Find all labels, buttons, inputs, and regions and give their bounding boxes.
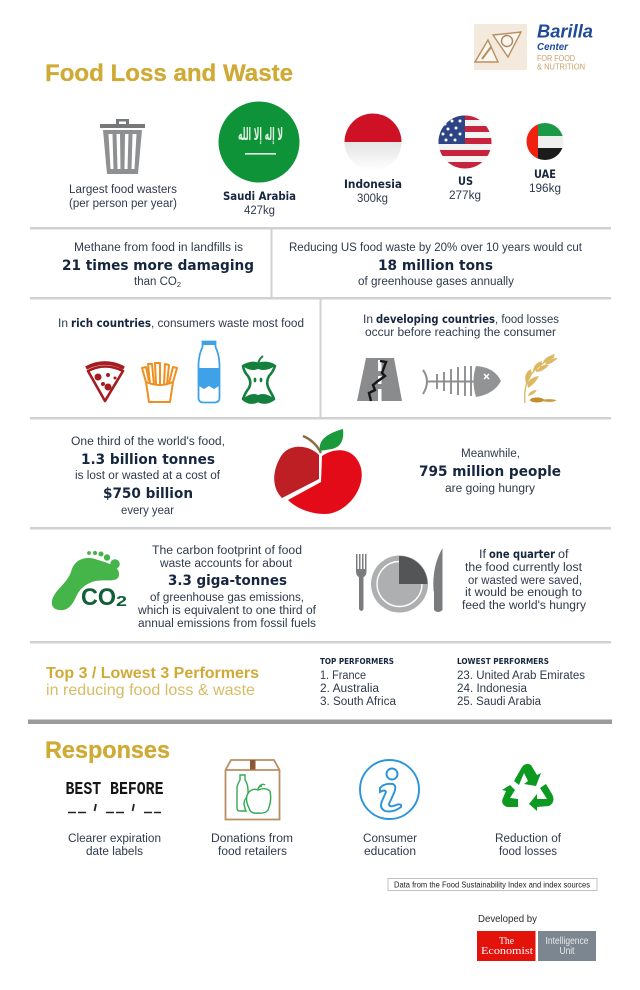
logo: The Economist: The [499,936,515,947]
logo: Barilla Center: & NUTRITION [537,62,585,72]
icon: pizza [86,363,124,401]
icon: apple pie chart [274,429,362,514]
response label: reduction of food losses [495,833,562,858]
response label: consumer education [363,833,417,858]
text block: reducing US food waste: Reducing US food waste by 20% over 10 years would cut [289,242,583,254]
text: rich countries: , consumers waste most food [151,318,304,330]
text block: methane: 2 [177,280,181,289]
text block: one quarter: it would be enough to [465,587,582,599]
icon: fish skeleton [423,366,501,397]
list: lowest performers: 24. Indonesia [457,683,528,695]
text block: hungry: are going hungry [445,483,535,495]
icon: information [360,760,419,819]
icon: best before label: BEST BEFORE [66,780,164,800]
logo: Intelligence Unit: Intelligence [546,936,589,947]
text: developing countries [363,312,559,339]
text block: methane: than CO [134,276,177,288]
text block: carbon footprint [137,545,317,630]
list: top performers: 3. South Africa [320,696,397,708]
icon: plate with fork and knife [356,548,442,612]
text block: one third: One third of the world's food, [71,436,225,448]
list: top performers [320,657,397,708]
text block: one quarter: feed the world's hungry [462,600,586,612]
text: developing countries: occur before reaching the consumer [365,327,556,339]
logo: Barilla Center: Barilla [537,22,593,42]
response label: expiration [68,833,161,858]
response label: consumer education: Consumer [363,833,417,845]
text block: methane [62,242,254,289]
icon: bottle [198,341,220,402]
text block: one quarter: If [479,549,487,561]
logo: Barilla Center: Center [537,42,569,53]
label: Saudi Arabia 427kg: 427kg [244,205,275,217]
text block: one third [71,436,225,517]
text block: one quarter: or wasted were saved, [468,575,582,587]
label: Saudi Arabia 427kg: Saudi Arabia [223,189,296,203]
response label: consumer education: education [364,846,416,858]
text: rich countries [58,316,304,330]
label: largest food wasters: (per person per year) [69,198,177,210]
response label: reduction of food losses: food losses [499,846,557,858]
icon: fries [142,363,177,402]
label: Indonesia 300kg: 300kg [357,193,388,205]
flag: US [438,115,492,169]
label: Indonesia 300kg [344,177,402,205]
flag: UAE [526,123,564,160]
logo: Intelligence Unit: Unit [560,946,575,957]
heading: top 3 lowest 3 performers [46,665,259,699]
icon: best before label [66,780,164,812]
list: lowest performers: 25. Saudi Arabia [457,696,542,708]
label: UAE 196kg: 196kg [529,183,561,195]
icon: wheat [525,354,558,403]
icon: cracked road [357,358,402,401]
response label: expiration: date labels [86,846,143,858]
heading: top 3 lowest 3 performers: Top 3 / Lowest 3 Performers [46,665,259,682]
text block: one third: $750 billion [103,486,193,502]
label: US 277kg: US [458,174,473,188]
text block: one quarter: one quarter [489,547,555,561]
label: US 277kg [449,174,481,202]
text block: methane: 21 times more damaging [62,258,254,274]
text block: hungry [419,448,561,495]
list: lowest performers [457,657,585,708]
developed by: Developed by [478,914,537,925]
icon: CO2 footprint: 2 [116,593,127,610]
icon: trash can [100,119,145,174]
list: top performers: 1. France [320,670,366,682]
icon: apple core [243,356,275,403]
icon: CO2 footprint: CO [81,584,116,611]
text: rich countries: rich countries [71,316,151,330]
text block: carbon footprint: which is equivalent to one third of [137,605,317,617]
title: Food Loss and Waste [45,60,293,87]
list: top performers: 2. Australia [320,683,380,695]
text block: carbon footprint: annual emissions from fossil fuels [138,618,316,630]
label: Saudi Arabia 427kg [223,189,296,217]
text block: one quarter [462,547,586,612]
source note: Data from the Food Sustainability Index and index sources [394,880,590,890]
response label: expiration: Clearer expiration [68,833,161,845]
text block: hungry: Meanwhile, [461,448,520,460]
label: largest food wasters [69,184,177,210]
list: lowest performers: 23. United Arab Emirates [457,670,585,682]
response label: donations: food retailers [218,846,287,858]
label: UAE 196kg [529,167,561,195]
list: top performers: TOP PERFORMERS [320,657,394,666]
label: US 277kg: 277kg [449,190,481,202]
icon: CO2 footprint [52,551,127,611]
text block: methane: Methane from food in landfills is [74,242,243,254]
logo: Barilla Center [474,22,593,72]
text block: one third: every year [121,505,174,517]
text block: one third: 1.3 billion tonnes [81,452,215,468]
icon: recycle [502,764,553,811]
logo: The Economist: Economist [481,946,533,957]
list: lowest performers: LOWEST PERFORMERS [457,657,549,666]
text block: one third: is lost or wasted at a cost of [75,470,221,482]
text block: reducing US food waste: of greenhouse gases annually [358,276,514,288]
text block: carbon footprint: waste accounts for about [159,558,293,570]
text: developing countries: developing countries [376,312,495,326]
flag: Saudi Arabia [218,102,300,182]
text: developing countries: In [363,314,373,326]
response label: reduction of food losses: Reduction of [495,833,562,845]
text block: reducing US food waste [289,242,583,288]
logo: The Economist [477,931,536,961]
text block: carbon footprint: 3.3 giga-tonnes [168,573,287,589]
text block: carbon footprint: The carbon footprint of food [152,545,302,557]
text block: one quarter: of [558,549,569,561]
label: Indonesia 300kg: Indonesia [344,177,402,191]
heading: responses: Responses [45,737,170,764]
label: UAE 196kg: UAE [534,167,556,181]
logo: Barilla Center: FOR FOOD [537,54,575,63]
icon: donation box [226,760,280,820]
text: developing countries: , food losses [495,314,559,326]
heading: top 3 lowest 3 performers: in reducing food loss & waste [46,682,255,699]
text: rich countries: In [58,318,68,330]
text block: hungry: 795 million people [419,464,561,480]
flag: Indonesia [344,114,402,170]
logo: Intelligence Unit [538,931,596,961]
text block: carbon footprint: of greenhouse gas emissions, [150,592,304,604]
flag: Saudi Arabia: لا إله إلا الله [238,125,283,145]
response label: donations: Donations from [211,833,293,845]
label: largest food wasters: Largest food wasters [69,184,177,196]
response label: donations [211,833,293,858]
text block: one quarter: the food currently lost [465,562,583,574]
text block: reducing US food waste: 18 million tons [378,258,493,274]
